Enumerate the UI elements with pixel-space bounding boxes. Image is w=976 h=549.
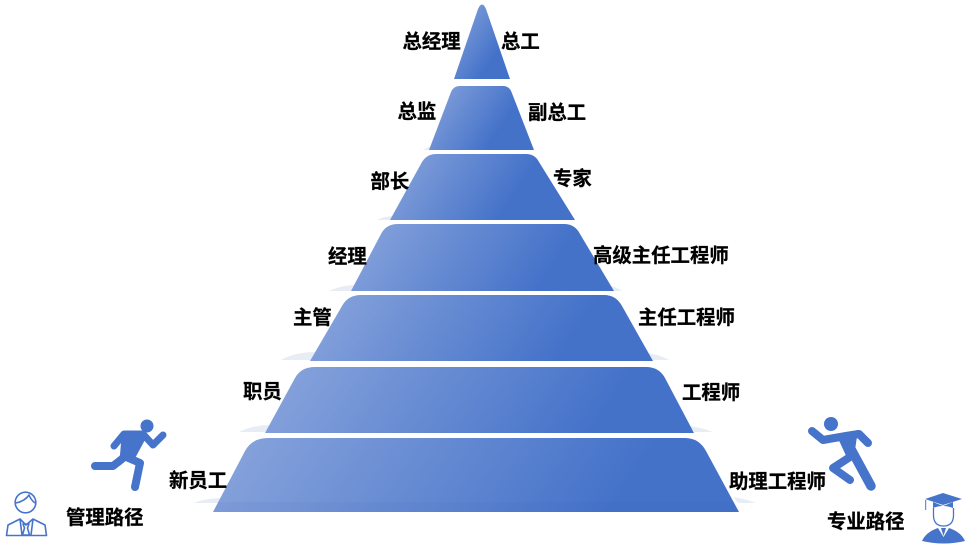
label: 主管: 主管 <box>293 306 332 329</box>
tier 3: 部长 / 专家 <box>390 154 575 220</box>
label: 总工: 总工 <box>501 31 540 53</box>
tier shadows <box>194 146 756 503</box>
label: 总经理: 总经理 <box>402 31 461 53</box>
label: 职员: 职员 <box>243 381 282 403</box>
label: 专家: 专家 <box>553 167 592 190</box>
management path labels <box>169 31 461 492</box>
label: 助理工程师: 助理工程师 <box>729 471 826 493</box>
label: 主任工程师: 主任工程师 <box>638 307 735 329</box>
label: 部长: 部长 <box>370 170 409 193</box>
pyramid <box>194 4 756 512</box>
label: 专业路径: 专业路径 <box>827 511 905 533</box>
label: 总监: 总监 <box>398 101 436 123</box>
icon: runner, technical path <box>812 417 871 486</box>
label: 高级主任工程师: 高级主任工程师 <box>593 244 729 267</box>
tier 2: 总监 / 副总工 <box>429 86 534 150</box>
tier 5: 主管 / 主任工程师 <box>310 295 653 361</box>
label: 工程师: 工程师 <box>682 382 740 404</box>
tier 4: 经理 / 高级主任工程师 <box>351 224 614 291</box>
label: 副总工: 副总工 <box>528 102 586 124</box>
tier 6: 职员 / 工程师 <box>265 367 694 433</box>
label: 管理路径: 管理路径 <box>66 506 144 529</box>
tier 1: 总经理 / 总工 <box>454 4 510 79</box>
technical path labels <box>501 31 826 493</box>
label: 经理: 经理 <box>328 246 367 268</box>
icon: graduate <box>922 493 965 544</box>
label: 新员工: 新员工 <box>169 470 227 492</box>
tier 7 base band <box>213 502 739 512</box>
icon: manager in suit <box>6 492 46 536</box>
icon: runner, management path <box>95 420 163 487</box>
tier 7: 新员工 / 助理工程师 <box>213 438 739 512</box>
